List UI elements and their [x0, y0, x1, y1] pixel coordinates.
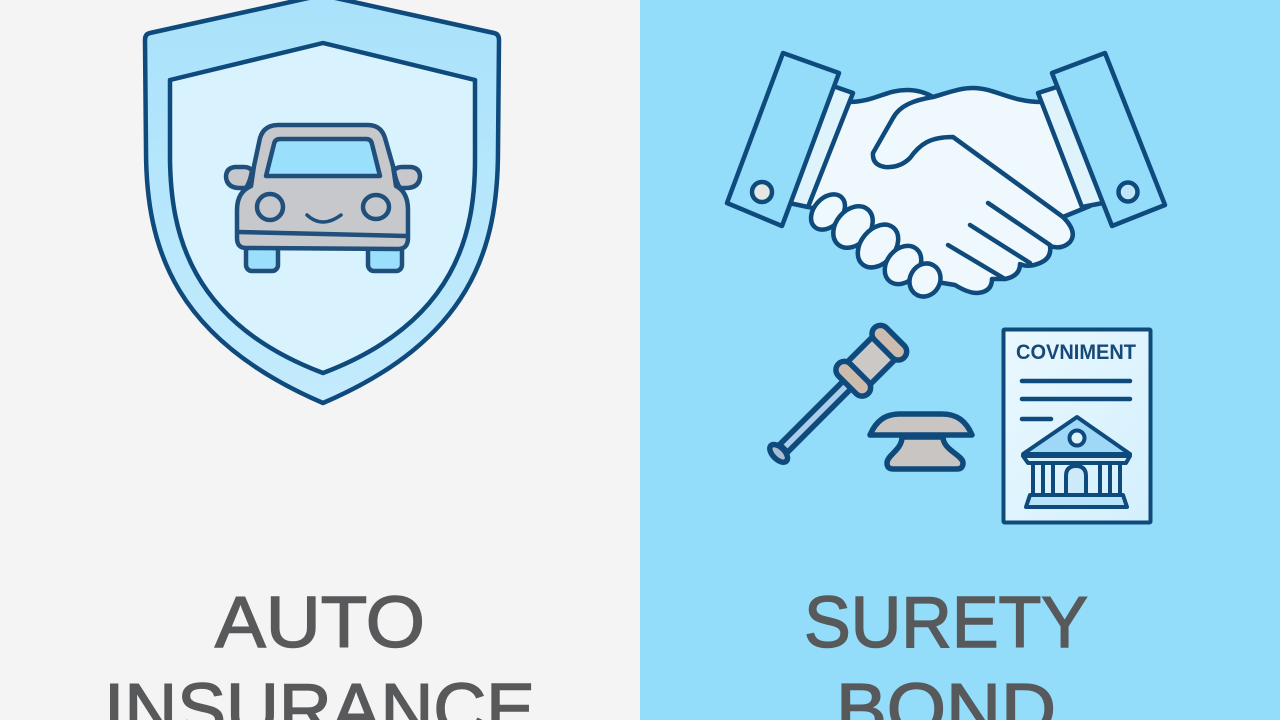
- icon: gavel: [760, 322, 972, 472]
- icon: handshake: [727, 53, 1165, 302]
- car windshield: [266, 139, 380, 176]
- heading: surety bond: [804, 583, 1088, 720]
- car headlights: [257, 194, 283, 220]
- car body: [237, 125, 408, 249]
- car: [226, 125, 420, 271]
- sleeve buttons: [752, 182, 772, 202]
- finger lines: [948, 203, 1050, 279]
- gavel base: [870, 414, 972, 435]
- panel: auto insurance: [0, 0, 640, 720]
- shield inner face: [170, 43, 475, 373]
- heading: auto insurance: [104, 583, 535, 720]
- icon: shield with car: [145, 0, 499, 403]
- car bumper line: [238, 232, 407, 236]
- right sleeve: [1052, 53, 1165, 226]
- left sleeve: [727, 53, 839, 226]
- thumb and index line: [873, 97, 1063, 217]
- icon: government document: [1004, 330, 1150, 522]
- car wheels: [246, 245, 402, 271]
- car mirrors: [226, 167, 420, 188]
- car smile: [307, 215, 341, 222]
- document sheet: [1004, 330, 1150, 522]
- shield outer rim: [145, 0, 499, 403]
- heading: auto insurance: AUTO: [215, 583, 425, 663]
- gavel mallet: [760, 322, 910, 472]
- government building: [1023, 417, 1130, 507]
- document text lines: [1022, 381, 1130, 419]
- document title: COVNIMENT: [1016, 341, 1136, 364]
- left cuff band: [789, 86, 853, 207]
- heading: surety bond: SURETY: [804, 583, 1088, 663]
- panel: surety bond: [640, 0, 1280, 720]
- hands: [800, 88, 1090, 293]
- knuckles: [804, 188, 946, 302]
- right cuff band: [1038, 86, 1103, 207]
